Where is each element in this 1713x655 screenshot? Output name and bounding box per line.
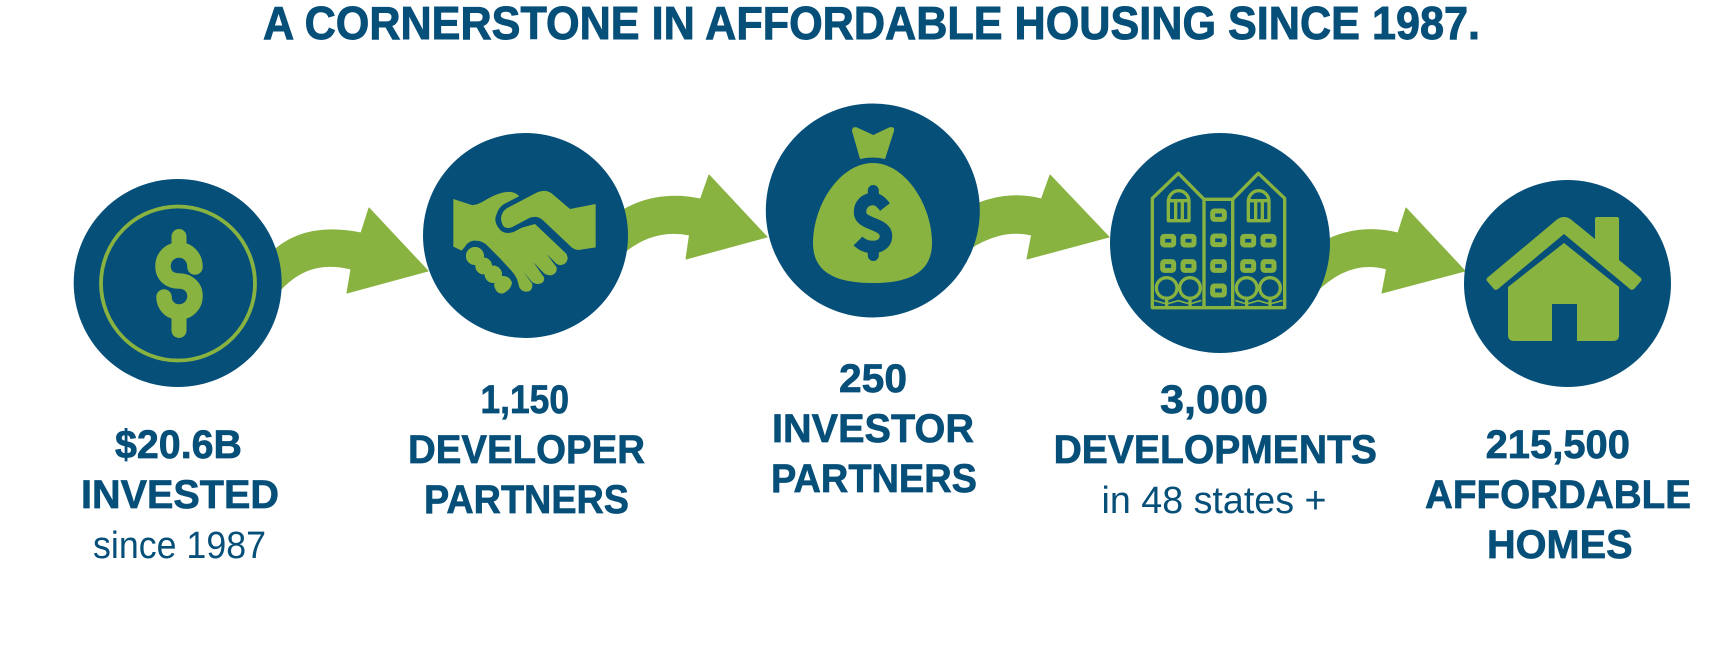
- circle: developer partners: [423, 133, 628, 338]
- icon: apartment building: [1152, 173, 1285, 308]
- icon: money bag: [813, 127, 932, 283]
- panel: invested step: [74, 179, 282, 567]
- stat: $20.6B invested since 1987: since 1987: [93, 525, 266, 567]
- arrow: step 2 to step 3: [620, 175, 767, 259]
- arrow: step 1 to step 2: [270, 208, 428, 295]
- icon: house: [1486, 217, 1642, 341]
- stat: 3,000 developments in 48 states: [1054, 378, 1377, 522]
- circle: investor partners: [766, 104, 980, 318]
- circle: invested: [74, 179, 282, 387]
- circle: developments: [1110, 133, 1330, 353]
- arrow: step 3 to step 4: [968, 175, 1109, 259]
- icon: dollar coin: [101, 206, 255, 360]
- stat: 3,000 developments in 48 states: 3,000: [1160, 378, 1268, 422]
- stat: 215,500 affordable homes: 215,500: [1486, 423, 1630, 467]
- stat: 250 investor partners: INVESTOR: [772, 407, 974, 451]
- stat: 1,150 developer partners: PARTNERS: [424, 478, 629, 522]
- stat: 1,150 developer partners: [408, 378, 645, 522]
- panel: affordable homes step: [1425, 180, 1691, 567]
- stat: $20.6B invested since 1987: [81, 423, 279, 567]
- panel: investor partners step: [766, 104, 980, 501]
- stat: $20.6B invested since 1987: $20.6B: [115, 423, 242, 467]
- stat: 215,500 affordable homes: AFFORDABLE: [1425, 473, 1691, 517]
- stat: 215,500 affordable homes: HOMES: [1487, 523, 1633, 567]
- stat: $20.6B invested since 1987: INVESTED: [81, 473, 279, 517]
- stat: 1,150 developer partners: DEVELOPER: [408, 428, 645, 472]
- stat: 250 investor partners: [771, 357, 977, 501]
- stat: 250 investor partners: 250: [839, 357, 907, 401]
- stat: 250 investor partners: PARTNERS: [771, 457, 977, 501]
- stat: 3,000 developments in 48 states: in 48 states +: [1102, 480, 1326, 522]
- panel: developer partners step: [408, 133, 645, 522]
- stat: 3,000 developments in 48 states: DEVELOPMENTS: [1054, 428, 1377, 472]
- icon: handshake: [453, 191, 596, 293]
- arrow: step 4 to step 5: [1316, 208, 1465, 293]
- circle: affordable homes: [1464, 180, 1671, 387]
- panel: developments step: [1054, 133, 1377, 522]
- stat: 215,500 affordable homes: [1425, 423, 1691, 567]
- stat: 1,150 developer partners: 1,150: [480, 378, 569, 422]
